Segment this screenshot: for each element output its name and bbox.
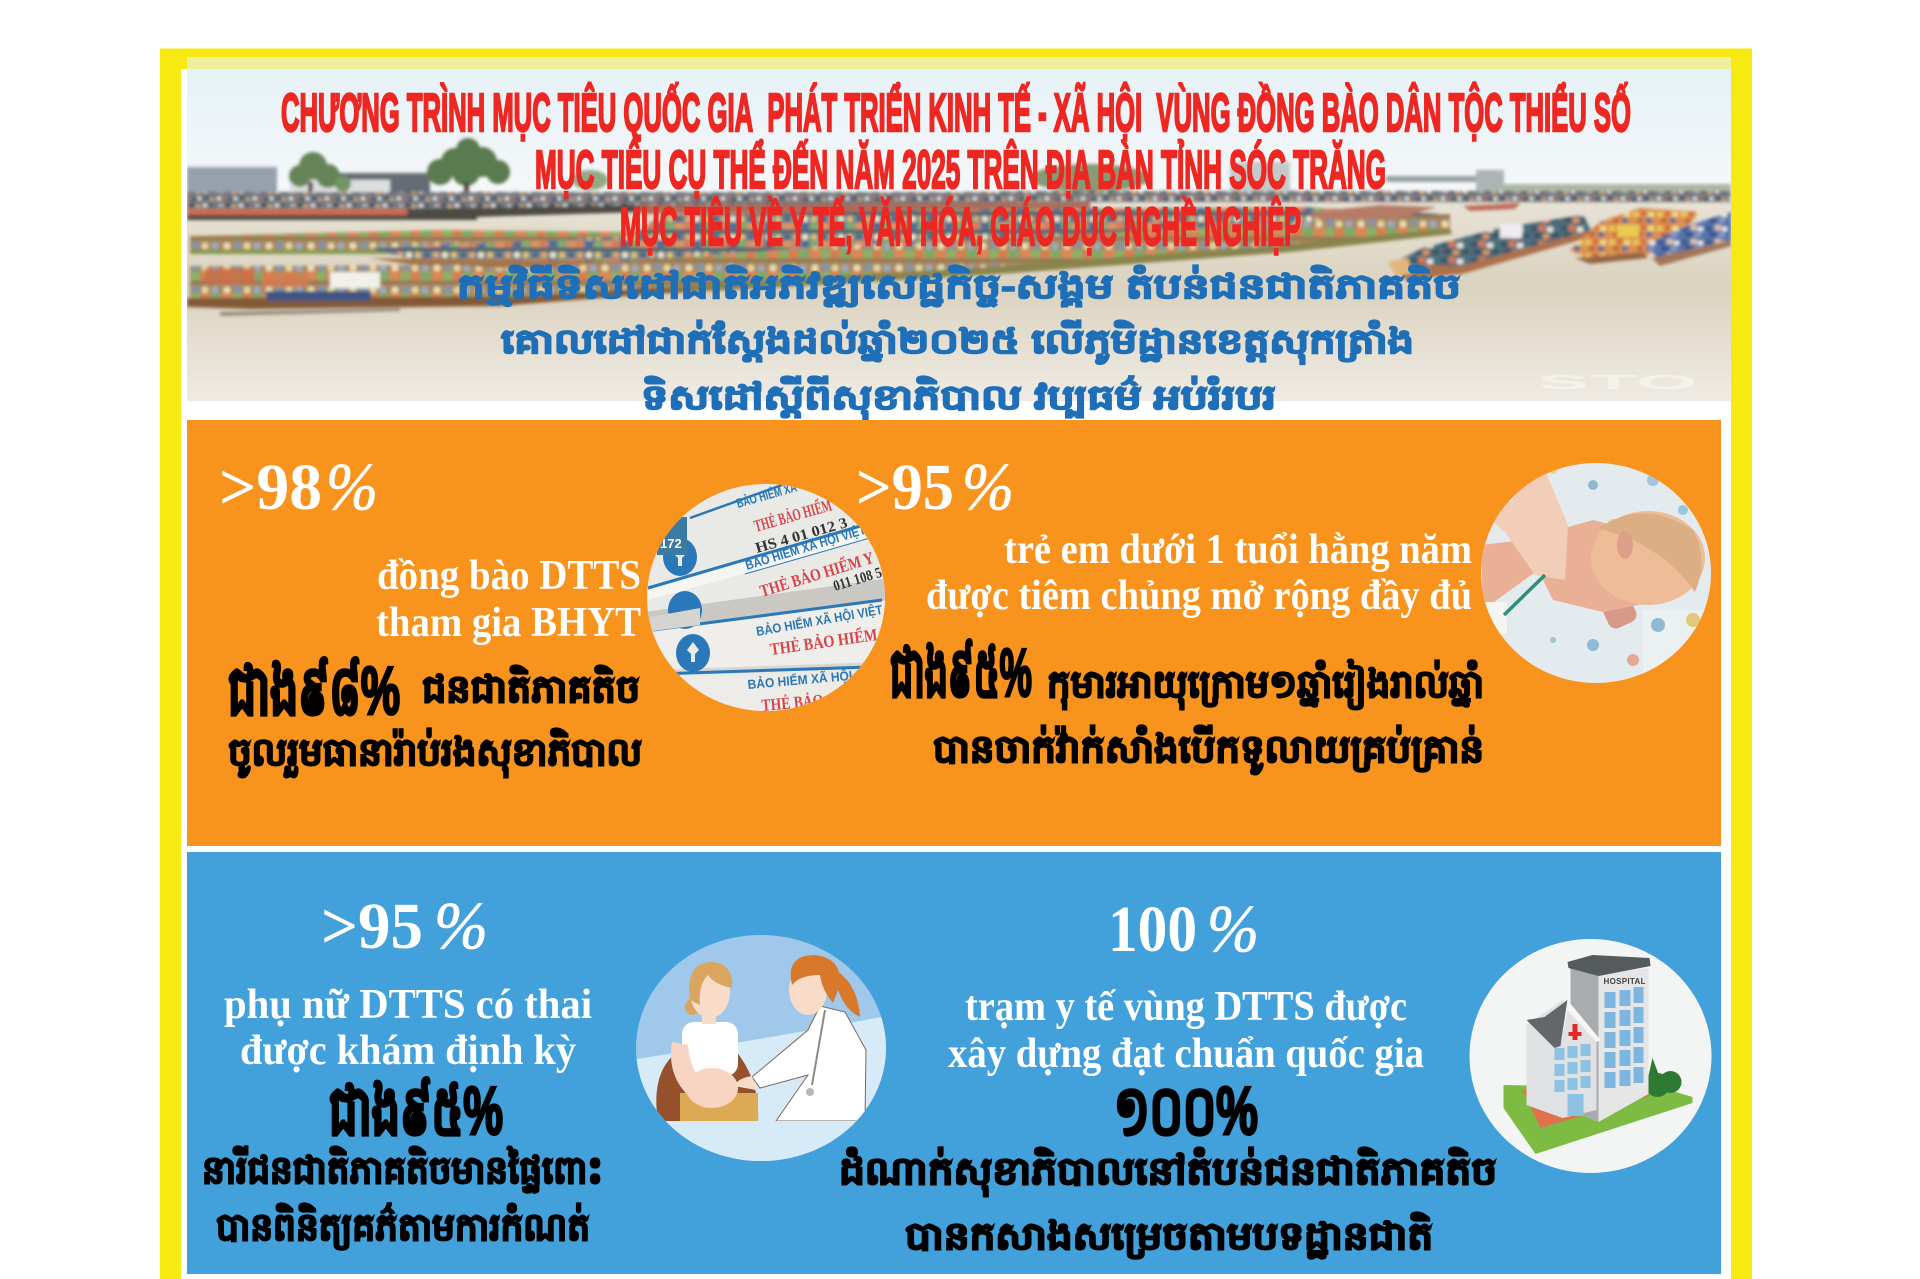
stat: 100 percent health stations: ដំណាក់សុខាភិបាលនៅតំបន់ជនជាតិភាគតិច	[839, 1147, 1497, 1197]
stat: 95 percent vaccination: %	[962, 450, 1014, 524]
stat: 95 percent vaccination: កុមារអាយុក្រោម១ឆ្នាំរៀងរាល់ឆ្នាំ	[1047, 659, 1484, 710]
stat: 95 percent vaccination: ជាង៩៥%	[890, 635, 1032, 711]
photo wash	[187, 138, 1731, 315]
stat: 100 percent health stations: xây dựng đạt chuẩn quốc gia	[948, 1031, 1424, 1077]
stat: 95 percent vaccination: được tiêm chủng mở rộng đầy đủ	[926, 573, 1472, 619]
stat: 98 percent insurance	[219, 450, 642, 778]
stat: 95 percent pregnant women: ជាង៩៥%	[329, 1073, 503, 1149]
icon: health insurance cards photo	[640, 479, 890, 716]
stat: 95 percent pregnant women: បានពិនិត្យគភ៌តាមការកំណត់	[216, 1203, 590, 1250]
stat: 95 percent pregnant women: >95	[321, 890, 423, 963]
stat: 98 percent insurance: ចូលរួមធានារ៉ាប់រងសុខាភិបាល	[228, 728, 642, 778]
watermark: STO	[1537, 372, 1697, 394]
stat: 95 percent vaccination: បានចាក់វ៉ាក់សាំងបើកទូលាយគ្រប់គ្រាន់	[933, 725, 1484, 775]
icon: health insurance cards photo: 011 108 5	[831, 565, 884, 595]
stat: 95 percent pregnant women: phụ nữ DTTS có thai	[224, 982, 592, 1028]
icon: baby vaccination photo	[1473, 460, 1718, 685]
stat: 98 percent insurance: %	[326, 450, 378, 524]
icon: health insurance cards photo: THẺ BẢO HIỂM Y	[758, 548, 876, 601]
stat: 98 percent insurance: ជនជាតិភាគតិច	[422, 665, 640, 711]
icon: doctor examining pregnant woman	[630, 930, 892, 1165]
stat: 95 percent pregnant women: %	[434, 889, 488, 963]
icon: health insurance cards photo: THẺ BẢO HIỂM	[769, 625, 879, 659]
icon: hospital building	[1462, 935, 1718, 1180]
stat: 98 percent insurance: ជាង៩៨%	[228, 653, 400, 729]
icon: hospital building: HOSPITAL	[1604, 977, 1646, 986]
icon: health insurance cards photo: BẢO HIỂM XÃ HỘI VIỆT	[755, 602, 884, 639]
title: Vietnamese heading	[281, 82, 1631, 257]
stat: 98 percent insurance: tham gia BHYT	[376, 600, 641, 646]
icon: health insurance cards photo: HS 4 01 012 3	[754, 515, 849, 557]
stat: 95 percent pregnant women: được khám định kỳ	[240, 1028, 576, 1074]
title: Khmer heading	[457, 265, 1461, 421]
stat: 100 percent health stations: trạm y tế vùng DTTS được	[965, 984, 1407, 1030]
icon: health insurance cards photo: BẢO HIỂM XÃ HỘI	[747, 668, 853, 692]
title: Khmer heading: គោលដៅជាក់ស្តែងដល់ឆ្នាំ២០២៥ លើភូមិដ្ឋានខេត្តសុកត្រាំង	[501, 320, 1414, 365]
scenery: shore, crowds and racing boats	[187, 138, 1731, 316]
yellow frame	[160, 48, 1752, 1279]
stat: 100 percent health stations	[839, 892, 1497, 1259]
stat: 98 percent insurance: >98	[219, 451, 322, 524]
stat: 100 percent health stations: %	[1207, 892, 1259, 966]
stat: 100 percent health stations: ១០០%	[1114, 1073, 1258, 1149]
stat: 95 percent vaccination: trẻ em dưới 1 tuổi hằng năm	[1004, 527, 1472, 573]
stat: 95 percent vaccination: >95	[856, 451, 954, 524]
stat: 95 percent pregnant women: នារីជនជាតិភាគតិចមានផ្ទៃពោះ	[202, 1146, 603, 1193]
title: Khmer heading: ទិសដៅស្តីពីសុខាភិបាល វប្បធម៌ អប់រំរបរ	[641, 375, 1276, 421]
icon: health insurance cards photo: THẺ BẢO	[761, 691, 824, 715]
title: Khmer heading: កម្មវិធីទិសដៅជាតិអភិវឌ្ឍសេដ្ឋកិច្ច-សង្គម តំបន់ជនជាតិភាគតិច	[457, 265, 1461, 307]
panel: blue health targets	[187, 852, 1721, 1274]
panel: orange health targets	[187, 420, 1721, 846]
stat: 95 percent vaccination	[856, 450, 1484, 775]
stat: 98 percent insurance: đồng bào DTTS	[377, 553, 641, 599]
icon: health insurance cards photo: THẺ BẢO HIỂM	[752, 496, 834, 536]
stat: 100 percent health stations: បានកសាងសម្រេចតាមបទដ្ឋានជាតិ	[905, 1212, 1433, 1259]
icon: health insurance cards photo: 172	[660, 536, 682, 551]
icon: health insurance cards photo: BẢO HIỂM XÃ HỘI VIỆT	[743, 522, 867, 573]
header photo: boat race on the river	[187, 69, 1731, 401]
stat: 100 percent health stations: 100	[1108, 893, 1197, 966]
icon: health insurance cards photo: BẢO HIỂM XÃ	[735, 479, 799, 511]
stat: 95 percent pregnant women	[202, 889, 603, 1250]
